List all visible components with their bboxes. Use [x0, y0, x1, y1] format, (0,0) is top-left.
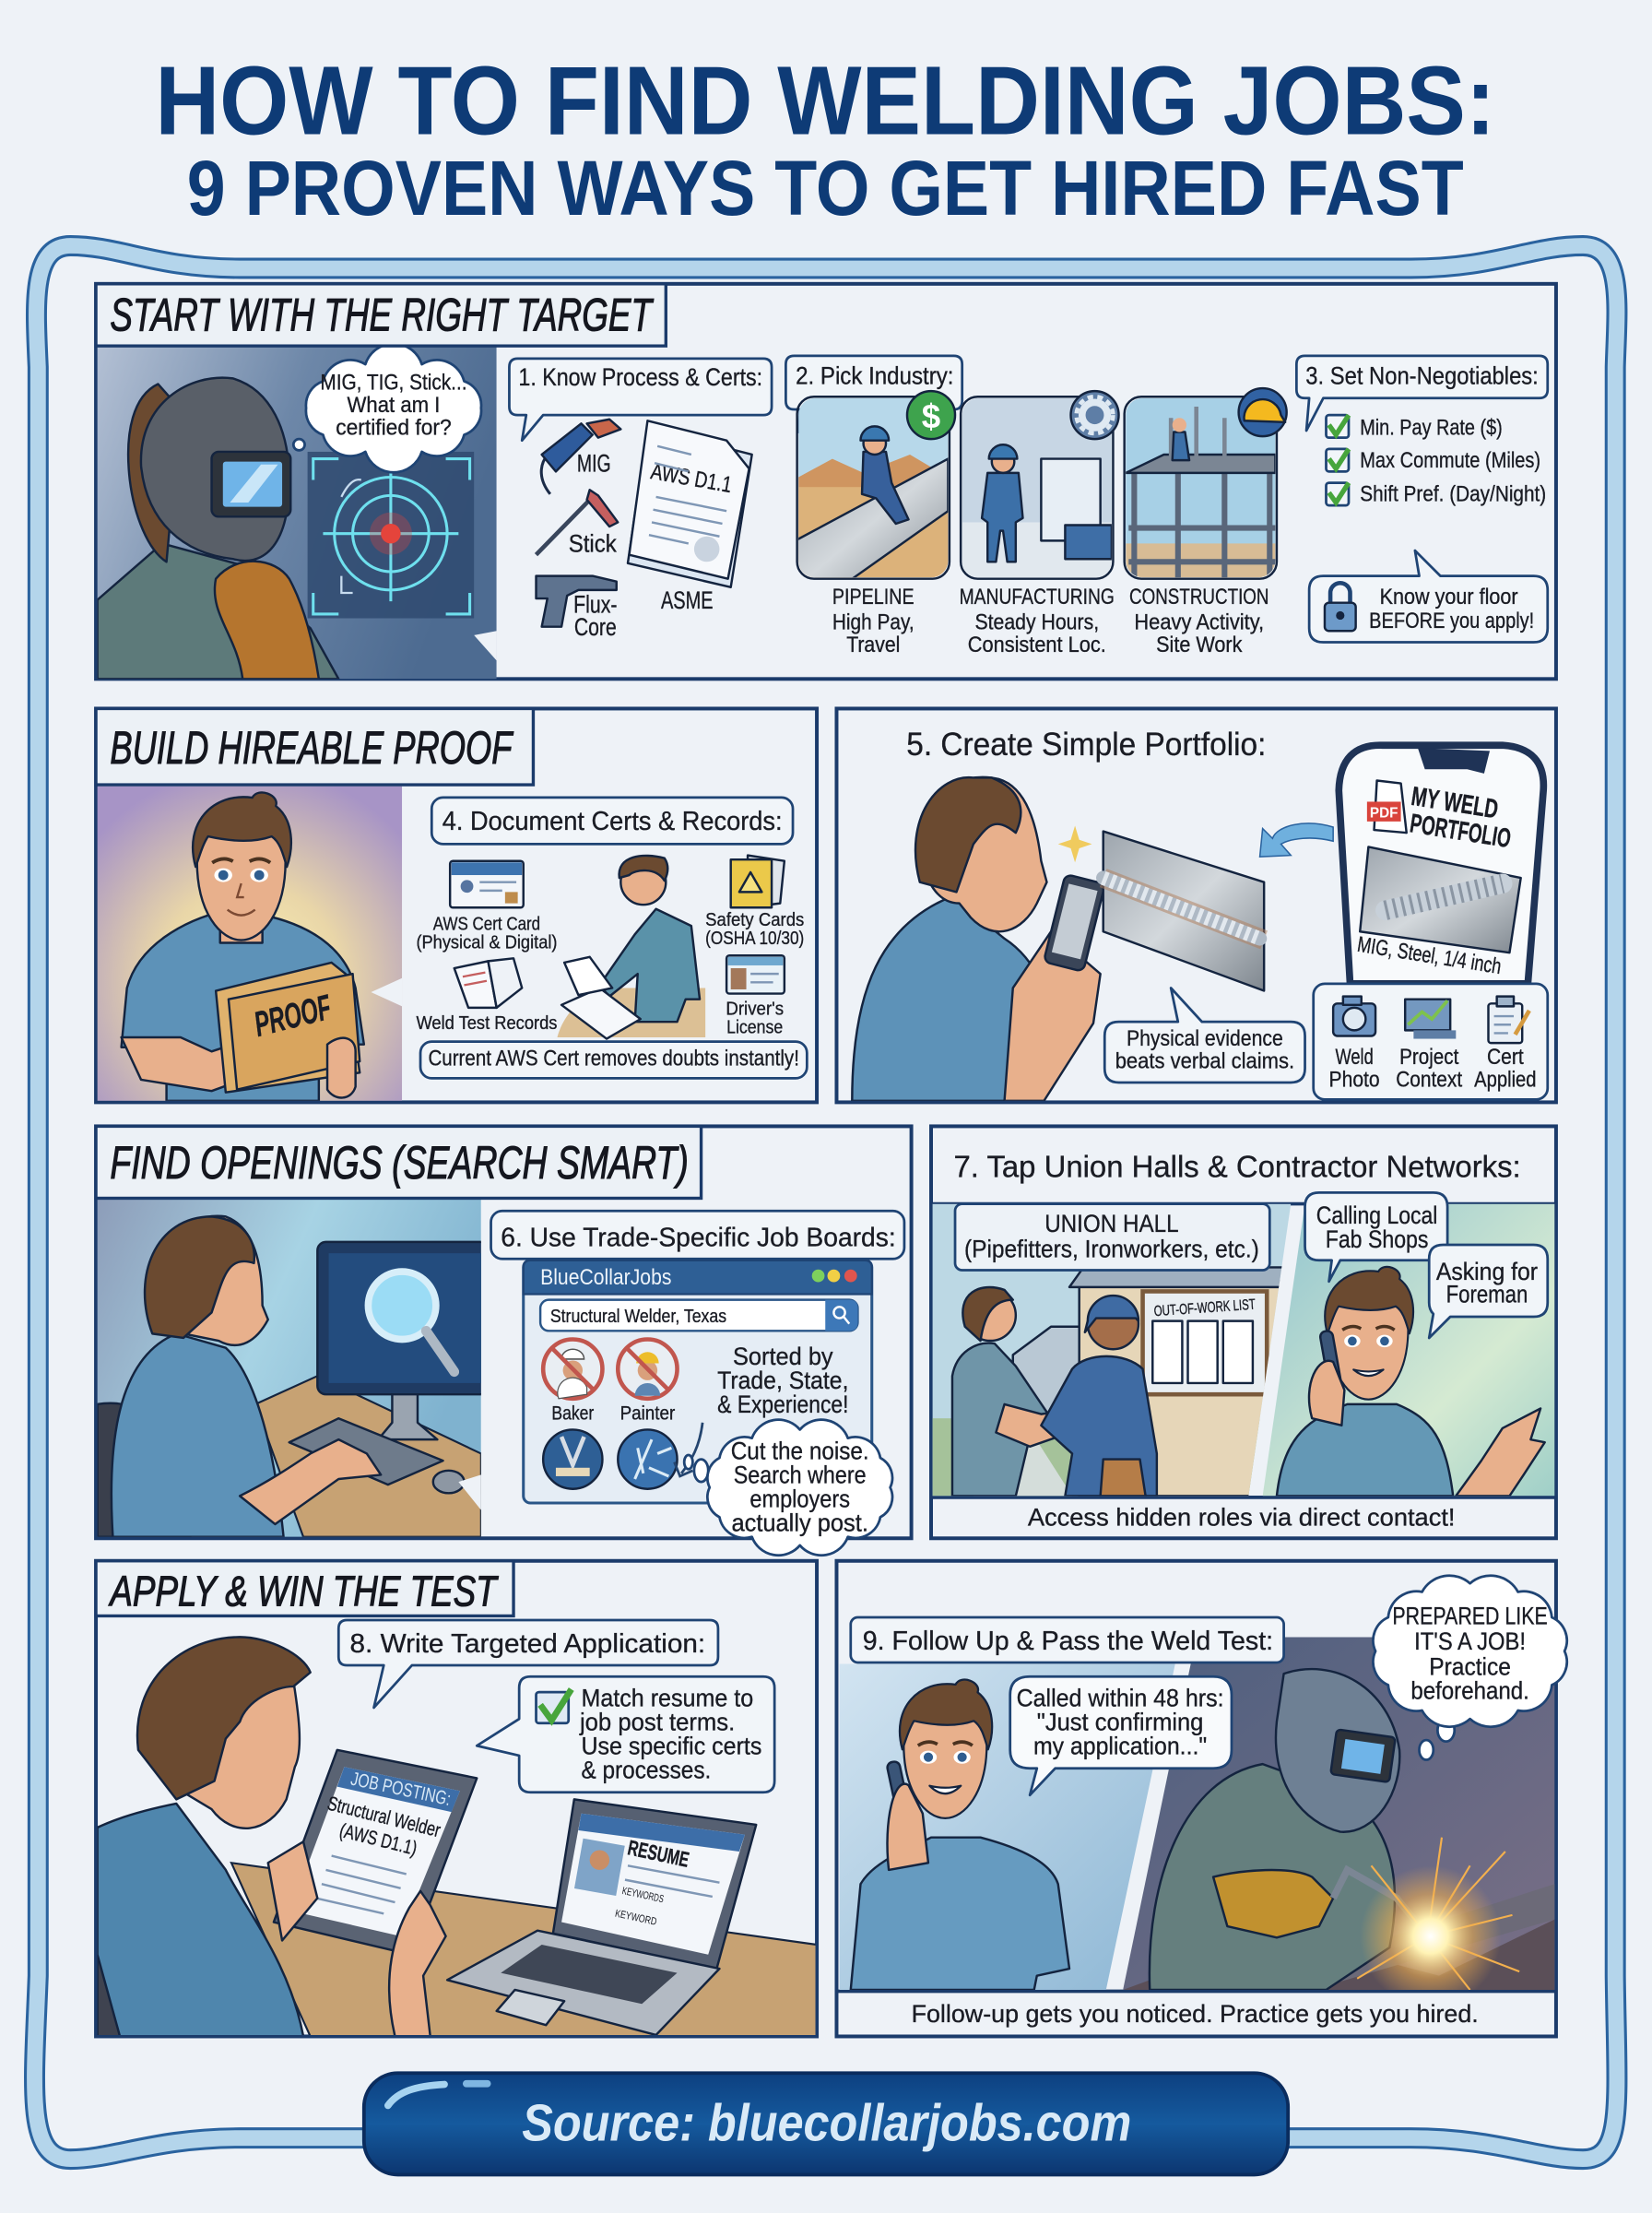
- portfolio contents box: Cert: [1487, 1046, 1524, 1070]
- title: [155, 47, 1495, 231]
- callout: 1. know process and certs: [509, 359, 772, 441]
- folder: PROOF: [250, 988, 336, 1045]
- icon: gear badge: [1071, 391, 1119, 439]
- thought cloud: prepared like it's a job: beforehand.: [1410, 1677, 1529, 1705]
- callout: 8. write targeted application: [338, 1620, 718, 1708]
- icon: curved arrow: [1260, 823, 1333, 857]
- section heading: START WITH THE RIGHT TARGET: [110, 288, 654, 340]
- right man in uniform: [1041, 1296, 1157, 1496]
- thought cloud: cut the noise: Cut the noise.: [731, 1438, 869, 1465]
- tablet with job posting: Structural Welder: [325, 1793, 442, 1841]
- illustration: steel plate with weld bead: [1058, 825, 1264, 991]
- icon: PDF document: PDF: [1370, 805, 1398, 821]
- thought cloud: cut the noise: Search where: [734, 1462, 867, 1489]
- thought bubble: MIG, TIG, Stick...: [320, 372, 467, 396]
- illustration: man making phone call: [1263, 1204, 1554, 1496]
- icon: AWS cert card: AWS Cert Card: [433, 914, 540, 935]
- icon: baker crossed out: [543, 1340, 602, 1425]
- icon: certification document: [628, 420, 752, 587]
- callout: match resume: & processes.: [581, 1756, 711, 1783]
- illustration: union hall handshake: [933, 1204, 1299, 1496]
- illustration: man photographing weld: [852, 777, 1101, 1101]
- industry labels: CONSTRUCTION: [1129, 586, 1269, 609]
- laptop with resume: KEYWORDS: [621, 1886, 665, 1905]
- industry labels: Travel: [846, 633, 900, 657]
- illustration: phone with portfolio: MY WELD: [1410, 782, 1500, 824]
- thought bubble: certified for?: [336, 417, 452, 441]
- illustration: welder thinking about target: [98, 346, 497, 679]
- icon: PDF document: [1367, 780, 1407, 833]
- icon: stick electrode holder: [537, 490, 618, 558]
- panel: union halls and contractor networks: [931, 1126, 1556, 1538]
- speech bubble: called within 48 hours: my application...": [1033, 1732, 1207, 1759]
- callout: 3. set non-negotiables: [1296, 356, 1548, 431]
- thought cloud: prepared like it's a job: [1374, 1576, 1567, 1760]
- icon: flux-core gun: Core: [574, 613, 617, 641]
- speech bubble: asking for foreman: Foreman: [1446, 1281, 1528, 1308]
- illustration: man comparing tablet and laptop: [98, 1637, 817, 2036]
- industry labels: [832, 586, 1269, 657]
- callout: know your floor: [1309, 550, 1548, 643]
- label: ASME: ASME: [661, 586, 714, 614]
- section heading: [96, 284, 666, 346]
- panel: build hireable proof: [96, 708, 817, 1102]
- icon: dollar badge: $: [922, 397, 940, 435]
- job board browser window: BlueCollarJobs: [540, 1266, 671, 1290]
- checklist: Shift Pref. (Day/Night): [1360, 482, 1546, 506]
- callout: union hall: (Pipefitters, Ironworkers, etc.): [964, 1236, 1259, 1263]
- speech bubble: asking for foreman: Asking for: [1436, 1258, 1538, 1285]
- speech bubble: asking for foreman: [1429, 1245, 1548, 1338]
- callout: physical evidence: [1104, 988, 1305, 1083]
- icon: driver's license: Driver's: [726, 999, 784, 1020]
- panel: apply and win the test: [96, 1561, 817, 2036]
- speech bubble: calling local fab shops: Calling Local: [1316, 1201, 1437, 1229]
- search bar: [540, 1300, 857, 1331]
- thought cloud: cut the noise: actually post.: [731, 1509, 868, 1537]
- section heading: [96, 708, 533, 785]
- speech bubble: called within 48 hours: [1010, 1676, 1232, 1795]
- callout: 2. pick industry: 2. Pick Industry:: [796, 361, 953, 389]
- panel: follow up and pass the weld test: [836, 1561, 1567, 2036]
- heading: step 5: 5. Create Simple Portfolio:: [906, 727, 1266, 763]
- sorted text: Trade, State,: [717, 1367, 848, 1394]
- icon: welder trade badge: [543, 1429, 602, 1489]
- callout: trade specific job boards: 6. Use Trade-Specific Job Boards:: [501, 1224, 896, 1253]
- callout: 3. set non-negotiables: 3. Set Non-Negotiables:: [1305, 361, 1539, 389]
- icon: hard hat badge: [1239, 388, 1287, 436]
- callout: 9. follow up: [851, 1617, 1284, 1663]
- tablet with job posting: (AWS D1.1): [337, 1819, 419, 1860]
- callout: current AWS cert: Current AWS Cert removes doubts instantly!: [428, 1047, 799, 1071]
- illustration: man phoning after application: [840, 1663, 1178, 1992]
- callout: physical evidence: Physical evidence: [1127, 1027, 1283, 1051]
- portfolio contents box: [1314, 984, 1548, 1099]
- union notice board: [1143, 1291, 1267, 1394]
- thought cloud: prepared like it's a job: IT'S A JOB!: [1414, 1627, 1526, 1655]
- speech bubble: called within 48 hours: Called within 48 hrs:: [1017, 1684, 1224, 1711]
- callout: physical evidence: beats verbal claims.: [1115, 1050, 1294, 1074]
- illustration: manufacturing: [961, 391, 1119, 579]
- icon: certification document: AWS D1.1: [649, 459, 734, 498]
- callout: current AWS cert: [420, 1042, 807, 1078]
- source banner: Source: bluecollarjobs.com: [522, 2094, 1131, 2152]
- icon: AWS cert card: (Physical & Digital): [416, 932, 557, 953]
- illustration: phone with portfolio: [1339, 745, 1543, 984]
- arrow: [674, 1423, 702, 1476]
- icon: dollar badge: [907, 391, 955, 439]
- caption: access hidden roles: Access hidden roles via direct contact!: [1028, 1504, 1456, 1532]
- union notice board: OUT-OF-WORK LIST: [1153, 1296, 1256, 1320]
- illustration: man with binder: [557, 856, 705, 1039]
- folder: [216, 963, 360, 1093]
- thought cloud: prepared like it's a job: Practice: [1429, 1653, 1511, 1681]
- section heading: BUILD HIREABLE PROOF: [110, 721, 514, 774]
- panel: create simple portfolio: [836, 708, 1556, 1102]
- speech bubble: called within 48 hours: "Just confirming: [1037, 1708, 1203, 1735]
- icon: painter crossed out: [618, 1340, 678, 1425]
- checklist: [1326, 415, 1546, 506]
- callout: match resume: Use specific certs: [581, 1732, 761, 1759]
- callout: match resume: Match resume to: [581, 1684, 753, 1711]
- callout: 4. document certs: [431, 798, 793, 844]
- callout: 2. pick industry: [785, 356, 962, 432]
- icon: baker crossed out: Baker: [551, 1402, 594, 1425]
- callout: 4. document certs: 4. Document Certs & Records:: [442, 807, 783, 836]
- industry labels: Consistent Loc.: [968, 633, 1106, 657]
- sorted text: Sorted by: [733, 1343, 833, 1370]
- icon: MIG torch: [541, 420, 620, 494]
- portfolio contents box: Context: [1396, 1069, 1463, 1093]
- icon: padlock: [1325, 583, 1356, 631]
- callout: know your floor: Know your floor: [1380, 586, 1518, 609]
- callout: union hall: UNION HALL: [1044, 1210, 1179, 1237]
- icon: MIG torch: MIG: [577, 449, 611, 477]
- illustration: man searching at computer: [98, 1200, 494, 1537]
- icon: chart: [1405, 1000, 1456, 1039]
- icon: painter crossed out: Painter: [620, 1402, 675, 1425]
- thought cloud: cut the noise: [684, 1420, 892, 1556]
- speech bubble: calling local fab shops: Fab Shops: [1326, 1225, 1428, 1253]
- thought cloud: cut the noise: employers: [749, 1485, 850, 1513]
- speech bubble: calling local fab shops: [1305, 1192, 1447, 1282]
- industry labels: Steady Hours,: [974, 611, 1099, 635]
- icon: driver's license: [726, 955, 785, 1037]
- sorted text: [717, 1343, 848, 1418]
- industry labels: Site Work: [1156, 633, 1243, 657]
- icon: clipboard: [1488, 997, 1529, 1043]
- sorted text: & Experience!: [717, 1391, 848, 1418]
- callout: match resume: job post terms.: [579, 1708, 735, 1735]
- illustration: phone with portfolio: PORTFOLIO: [1408, 809, 1513, 854]
- section heading: APPLY & WIN THE TEST: [108, 1568, 499, 1615]
- title: 9 PROVEN WAYS TO GET HIRED FAST: [187, 145, 1464, 231]
- callout: 9. follow up: 9. Follow Up & Pass the Weld Test:: [863, 1627, 1273, 1656]
- callout: 1. know process and certs: 1. Know Process & Certs:: [518, 363, 762, 391]
- laptop with resume: KEYWORD: [614, 1909, 657, 1928]
- icon: green check: [537, 1689, 572, 1723]
- industry labels: High Pay,: [832, 611, 914, 635]
- tablet with job posting: [274, 1750, 477, 1955]
- icon: weld test records: Weld Test Records: [416, 1012, 557, 1034]
- illustration: welder practicing: [1123, 1637, 1554, 2006]
- icon: safety cards: (OSHA 10/30): [705, 928, 804, 949]
- icon: welding spark badge: [618, 1429, 678, 1489]
- job board browser window: [524, 1260, 872, 1503]
- portfolio contents box: Weld: [1335, 1046, 1374, 1070]
- icon: camera: [1333, 997, 1375, 1035]
- industry labels: PIPELINE: [832, 586, 914, 609]
- icon: safety cards: Safety Cards: [705, 909, 804, 930]
- industry labels: MANUFACTURING: [960, 586, 1115, 609]
- checklist: Max Commute (Miles): [1360, 449, 1540, 473]
- caption: follow-up gets you noticed: Follow-up gets you noticed. Practice gets you hired.: [912, 2000, 1479, 2028]
- industry labels: Heavy Activity,: [1134, 611, 1264, 635]
- icon: driver's license: License: [726, 1016, 783, 1037]
- thought cloud: prepared like it's a job: PREPARED LIKE: [1392, 1603, 1548, 1630]
- panel: find openings: [96, 1126, 912, 1556]
- thought bubble: What am I: [347, 394, 440, 418]
- illustration: phone in hand: [1044, 874, 1105, 972]
- laptop with resume: [447, 1799, 756, 2035]
- laptop with resume: RESUME: [626, 1835, 691, 1872]
- search bar: Structural Welder, Texas: [550, 1306, 726, 1327]
- callout: 8. write targeted application: 8. Write Targeted Application:: [350, 1629, 705, 1659]
- section heading: FIND OPENINGS (SEARCH SMART): [110, 1136, 689, 1189]
- illustration: construction: [1125, 388, 1287, 579]
- callout: trade specific job boards: [491, 1211, 904, 1259]
- source banner: [364, 2073, 1288, 2174]
- left man: [952, 1287, 1061, 1496]
- icon: AWS cert card: [416, 861, 557, 953]
- section heading: [96, 1126, 702, 1198]
- icon: stick electrode holder: Stick: [569, 530, 617, 558]
- thought bubble: [293, 344, 481, 472]
- icon: flux-core gun: Flux-: [573, 590, 618, 618]
- portfolio contents box: Project: [1399, 1046, 1459, 1070]
- portfolio contents box: Applied: [1474, 1069, 1537, 1093]
- heading: step 7: 7. Tap Union Halls & Contractor Networks:: [953, 1151, 1521, 1185]
- callout: union hall: [955, 1204, 1269, 1271]
- checklist: Min. Pay Rate ($): [1360, 417, 1503, 441]
- callout: know your floor: BEFORE you apply!: [1369, 609, 1534, 633]
- title: HOW TO FIND WELDING JOBS:: [155, 47, 1495, 156]
- callout: match resume: [477, 1676, 774, 1793]
- panel: start with the right target: [96, 284, 1556, 679]
- illustration: pipeline: [790, 391, 955, 593]
- icon: safety cards: [705, 856, 804, 949]
- icon: weld test records: [416, 958, 557, 1034]
- illustration: man holding proof folder: [98, 787, 402, 1101]
- illustration: phone with portfolio: MIG, Steel, 1/4 inch: [1355, 933, 1503, 979]
- tablet with job posting: JOB POSTING:: [348, 1769, 453, 1810]
- portfolio contents box: Photo: [1329, 1069, 1380, 1093]
- icon: flux-core gun: [537, 576, 618, 641]
